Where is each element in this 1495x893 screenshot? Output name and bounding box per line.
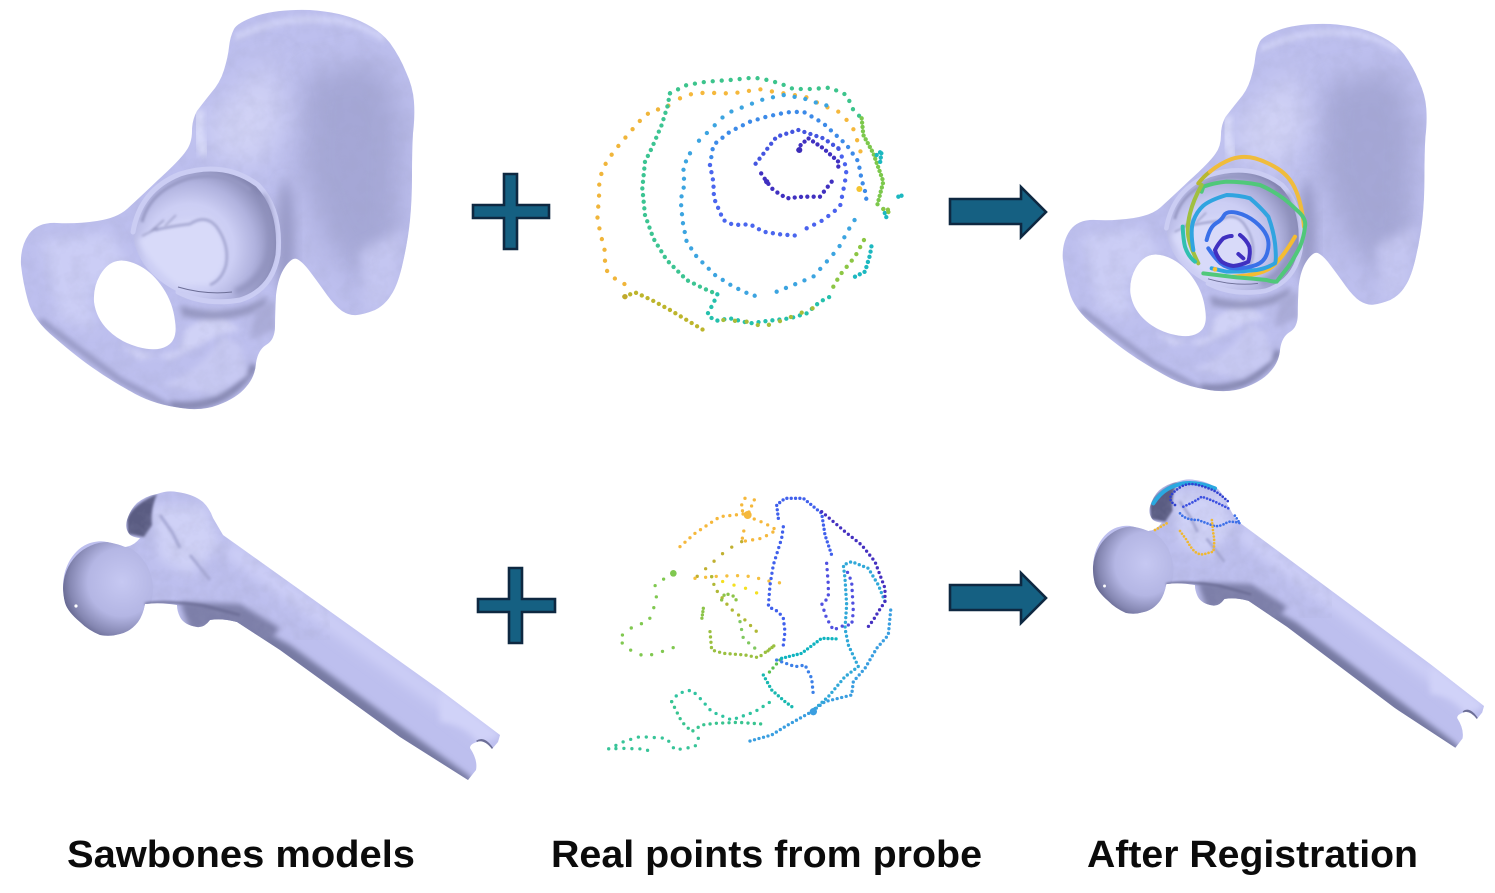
caption: After Registration: After Registration <box>1087 834 1418 876</box>
registered points on femur <box>1153 483 1240 554</box>
caption: Sawbones models: Sawbones models <box>67 834 415 876</box>
registered point rings on pelvis <box>1183 157 1305 282</box>
panel: pelvis after registration <box>1043 15 1441 401</box>
plus sign: femur row <box>478 568 555 643</box>
caption: Real points from probe: Real points from probe <box>551 834 982 876</box>
panel: femur Sawbones model <box>63 490 500 790</box>
panel: femur after registration <box>1093 478 1484 757</box>
panel: femur probe point cloud <box>608 498 891 753</box>
arrow: femur row <box>950 573 1046 623</box>
panel: pelvis probe point cloud <box>597 78 902 330</box>
plus sign: pelvis row <box>473 174 549 249</box>
arrow: pelvis row <box>950 187 1046 237</box>
panel: pelvis Sawbones model <box>0 0 430 420</box>
